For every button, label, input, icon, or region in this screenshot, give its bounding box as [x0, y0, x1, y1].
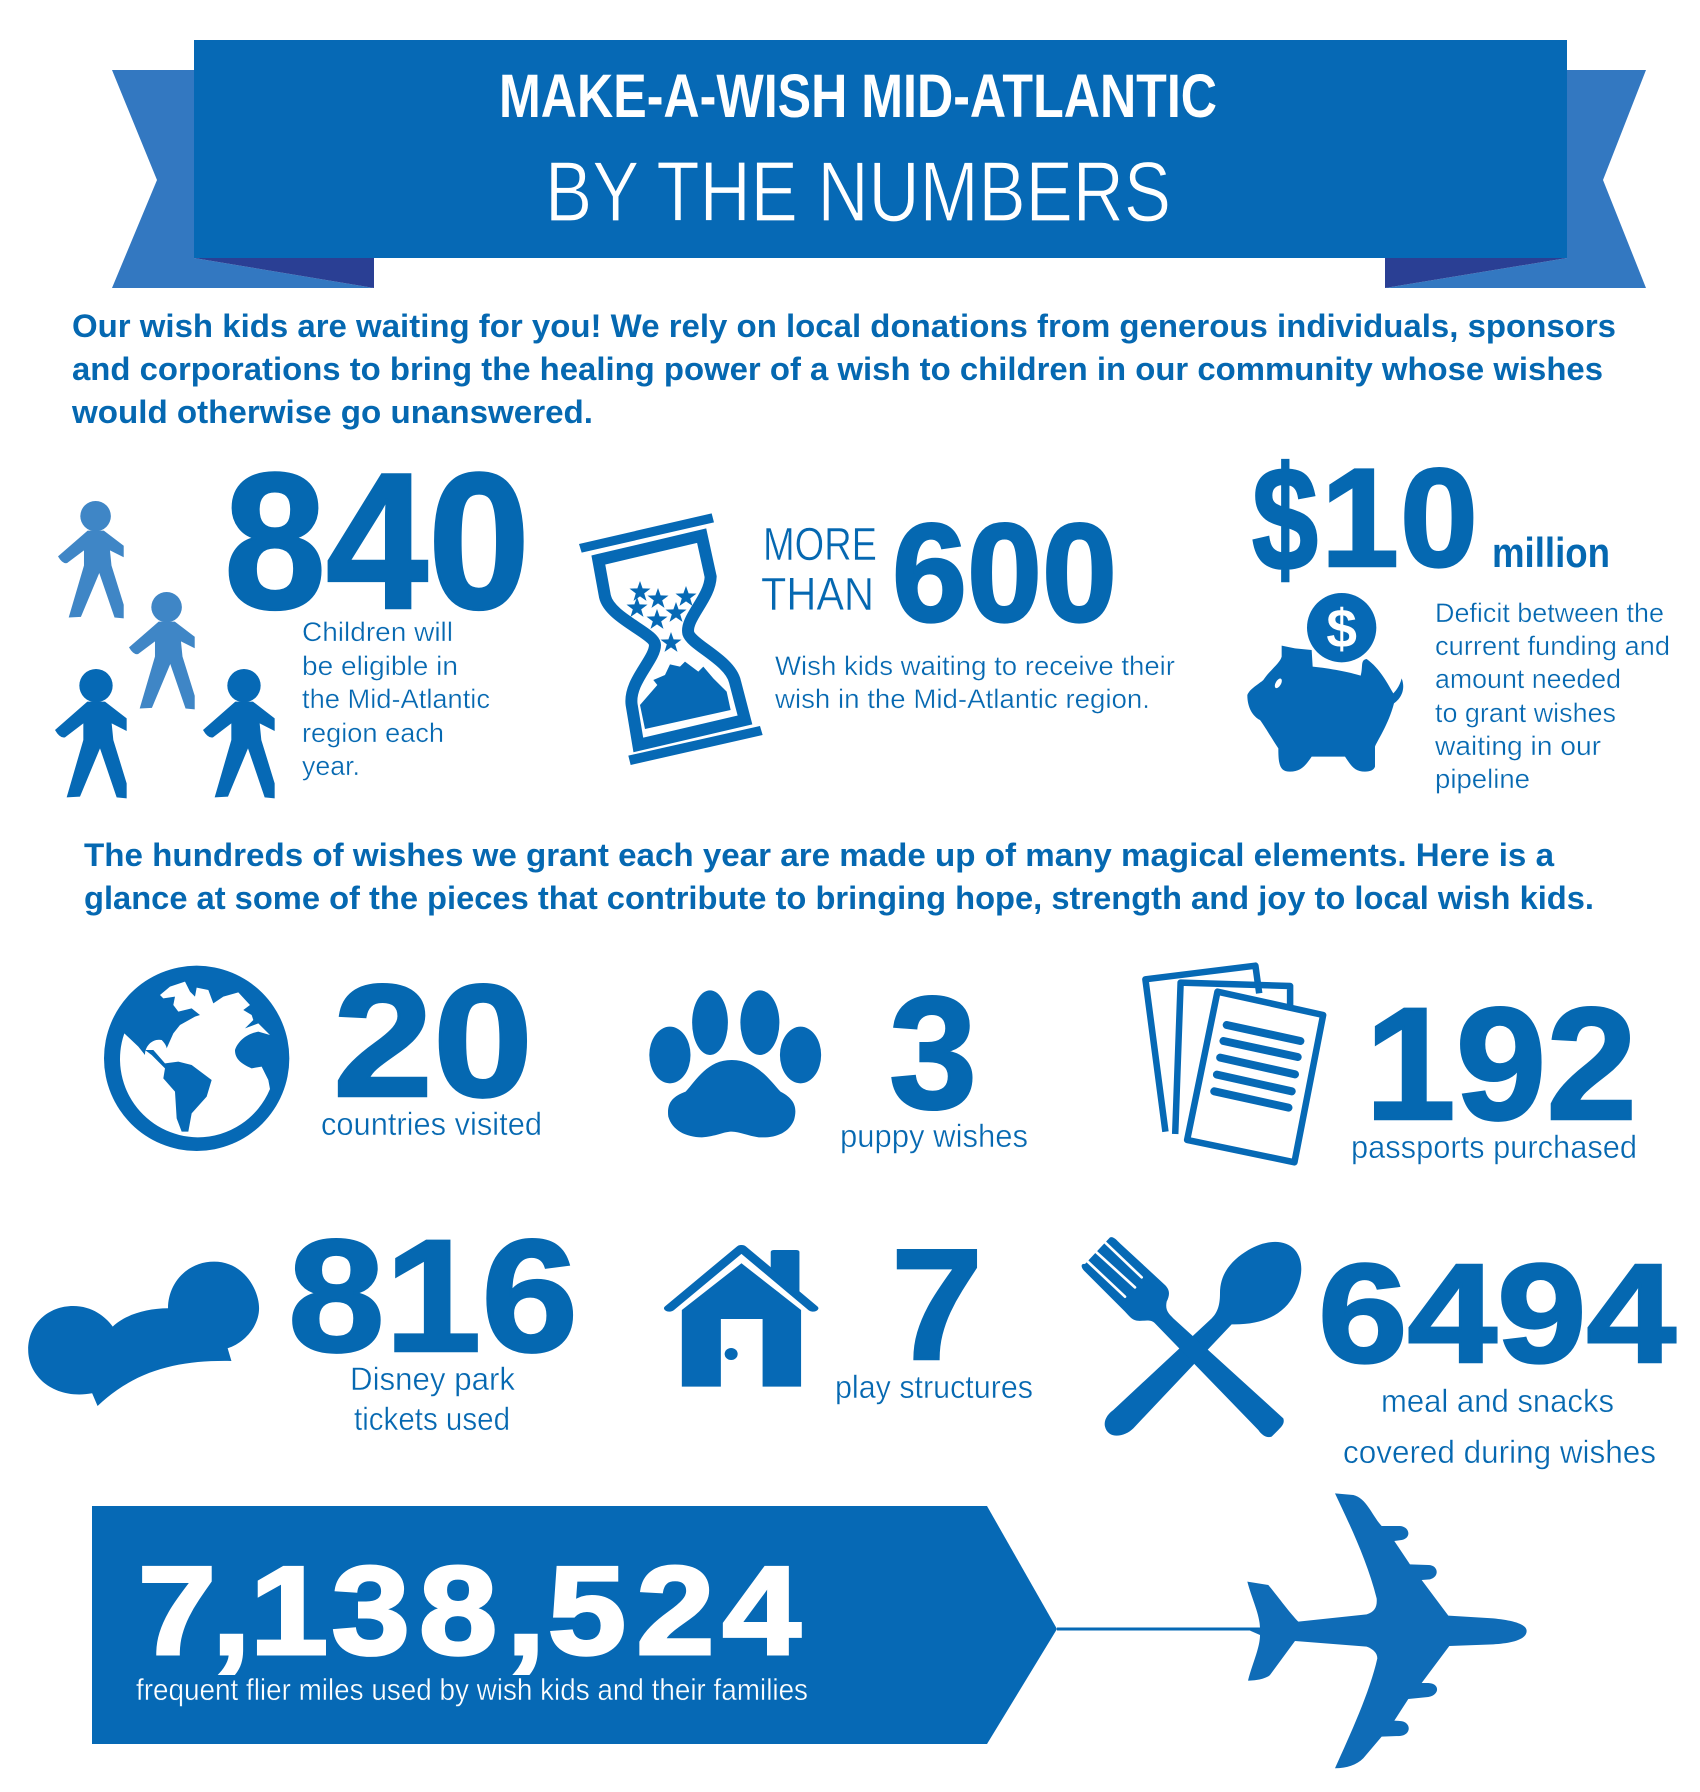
icon: house — [669, 1248, 813, 1387]
caption: frequent flier miles used by wish kids and their families — [136, 1672, 808, 1707]
stat: 3 puppy wishes — [649, 963, 1028, 1154]
label: million: million — [1492, 529, 1610, 576]
stat: 20 countries — [104, 951, 542, 1151]
caption: waiting in our — [1434, 731, 1601, 761]
stat: 816 Disney tickets — [28, 1206, 578, 1437]
number 3: 3 — [889, 963, 977, 1142]
icon: passports — [1145, 966, 1323, 1162]
label: meal and snacks — [1381, 1383, 1614, 1419]
number 6494: 6494 — [1318, 1234, 1676, 1392]
label: than: THAN — [761, 568, 874, 620]
intro paragraph: Our wish kids are waiting for you! We rely on local donations from generous individuals, sponsors — [72, 308, 1616, 344]
label — [1343, 1383, 1656, 1470]
title line 2: BY THE NUMBERS — [545, 145, 1171, 240]
tow line — [1057, 1628, 1262, 1630]
stat: 6494 meals — [1082, 1234, 1676, 1470]
icon: piggy bank: $ — [1326, 598, 1357, 660]
caption: wish in the Mid-Atlantic region. — [774, 684, 1150, 714]
label: covered during wishes — [1343, 1434, 1656, 1470]
caption: be eligible in — [302, 651, 458, 681]
title line 1: MAKE-A-WISH MID-ATLANTIC — [499, 62, 1217, 130]
icon: hourglass — [579, 513, 763, 765]
stat: 192 passports — [1145, 966, 1637, 1165]
number $10 — [1252, 437, 1478, 602]
label: passports purchased — [1351, 1129, 1637, 1165]
banner body — [194, 40, 1567, 258]
label: Disney park — [350, 1361, 516, 1397]
icon: paw — [649, 990, 821, 1137]
number 192: 192 — [1365, 974, 1637, 1153]
stat: 7 play structures — [669, 1217, 1033, 1405]
intro paragraph — [71, 308, 1616, 430]
caption: the Mid-Atlantic — [302, 684, 490, 714]
label: countries visited — [321, 1106, 542, 1142]
icon: mouse ears — [28, 1262, 259, 1406]
ribbon tails — [112, 70, 1646, 288]
label — [350, 1361, 516, 1437]
caption: current funding and — [1435, 631, 1670, 661]
icon: fork and spoon — [1082, 1237, 1301, 1437]
icon: children — [55, 501, 275, 798]
caption — [302, 617, 490, 781]
intro paragraph: and corporations to bring the healing power of a wish to children in our community whose wishes — [72, 351, 1603, 387]
icon: globe — [104, 966, 289, 1151]
second paragraph — [84, 837, 1594, 916]
second paragraph: The hundreds of wishes we grant each year are made up of many magical elements. Here is a — [84, 837, 1554, 873]
caption: to grant wishes — [1435, 698, 1616, 728]
stat: more than 600 — [579, 494, 1175, 765]
label: more: MORE — [763, 518, 877, 570]
caption: Children will — [302, 617, 453, 647]
label: tickets used — [354, 1401, 510, 1437]
number 7: 7 — [891, 1217, 983, 1393]
second paragraph: glance at some of the pieces that contribute to bringing hope, strength and joy to local wish kids. — [84, 880, 1594, 916]
stat: $10 million — [1247, 437, 1670, 794]
caption — [774, 651, 1175, 714]
number $10: $ — [1252, 437, 1318, 602]
panel: frequent flier miles — [92, 1493, 1527, 1768]
intro paragraph: would otherwise go unanswered. — [71, 394, 593, 430]
caption: region each — [302, 718, 444, 748]
number 816: 816 — [288, 1206, 578, 1385]
number 600: 600 — [892, 494, 1117, 651]
stat: 840 children — [55, 433, 530, 798]
caption: year. — [302, 751, 360, 781]
caption: Wish kids waiting to receive their — [775, 651, 1175, 681]
icon: piggy bank — [1247, 593, 1403, 772]
number 840: 840 — [224, 433, 530, 650]
arrow tag — [92, 1506, 1057, 1744]
caption: pipeline — [1435, 764, 1530, 794]
caption: Deficit between the — [1435, 598, 1664, 628]
number $10: 10 — [1321, 439, 1478, 596]
label: play structures — [835, 1369, 1033, 1405]
icon: airplane — [1247, 1493, 1527, 1768]
number 20: 20 — [333, 951, 533, 1130]
banner — [112, 40, 1646, 288]
caption — [1434, 598, 1670, 794]
number 7,138,524: 7,138,524 — [138, 1541, 801, 1681]
caption: amount needed — [1435, 664, 1621, 694]
label: puppy wishes — [840, 1118, 1028, 1154]
